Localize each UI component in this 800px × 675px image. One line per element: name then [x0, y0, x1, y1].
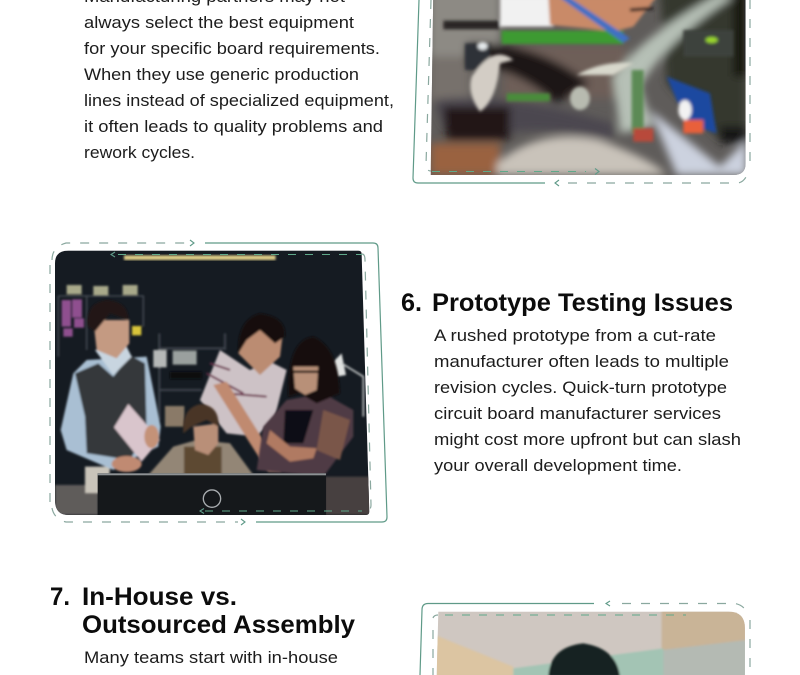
- heading: 7. In-House vs. Outsourced Assembly: In-House vs.: [82, 583, 237, 611]
- sticky notes: [58, 285, 143, 357]
- text block: item 6 body: your overall development time.: [434, 456, 682, 475]
- text block: item 5 body: lines instead of specialized equipment,: [84, 91, 394, 110]
- text block: item 6 body: A rushed prototype from a cut-rate: [434, 326, 716, 345]
- heading: 7. In-House vs. Outsourced Assembly: 7.: [50, 583, 70, 611]
- monitor: [98, 473, 326, 517]
- text block: item 5 body: it often leads to quality problems and: [84, 117, 383, 136]
- heading: 7. In-House vs. Outsourced Assembly: [50, 583, 355, 639]
- text block: item 6 body: manufacturer often leads to multiple: [434, 352, 729, 371]
- text block: item 5 body: for your specific board requirements.: [84, 39, 380, 58]
- heading: 6. Prototype Testing Issues: Prototype Testing Issues: [432, 289, 733, 317]
- photo: engineering team around a monitor: [53, 250, 373, 517]
- text block: item 6 body: might cost more upfront but can slash: [434, 430, 741, 449]
- person with vest: [61, 300, 161, 493]
- shelves and lamp: [55, 333, 372, 515]
- person with glasses and plaid shirt: [257, 337, 353, 477]
- text block: item 6 body: circuit board manufacturer services: [434, 404, 721, 423]
- text block: item 5 body: always select the best equipment: [84, 13, 354, 32]
- frame: dashed border around photo 7: [420, 601, 750, 675]
- text block: item 6 body: revision cycles. Quick-turn prototype: [434, 378, 727, 397]
- frame: dashed border around photo 6: [50, 240, 387, 525]
- person in striped shirt: [200, 313, 287, 472]
- photo: woman in front of pastel wall: [435, 610, 747, 675]
- heading: 6. Prototype Testing Issues: 6.: [401, 289, 422, 317]
- text block: item 5 body: rework cycles.: [84, 143, 195, 162]
- text block: item 5 body: [84, 0, 394, 162]
- text block: item 7 body: Many teams start with in-house: [84, 648, 338, 667]
- text block: item 5 body: When they use generic production: [84, 65, 359, 84]
- seated person: [148, 404, 253, 477]
- text block: item 6 body: [434, 326, 741, 475]
- photo: technician with circuit board equipment: [430, 0, 747, 177]
- heading: 7. In-House vs. Outsourced Assembly: Outsourced Assembly: [82, 611, 355, 639]
- frame: dashed border around photo 5: [413, 0, 750, 186]
